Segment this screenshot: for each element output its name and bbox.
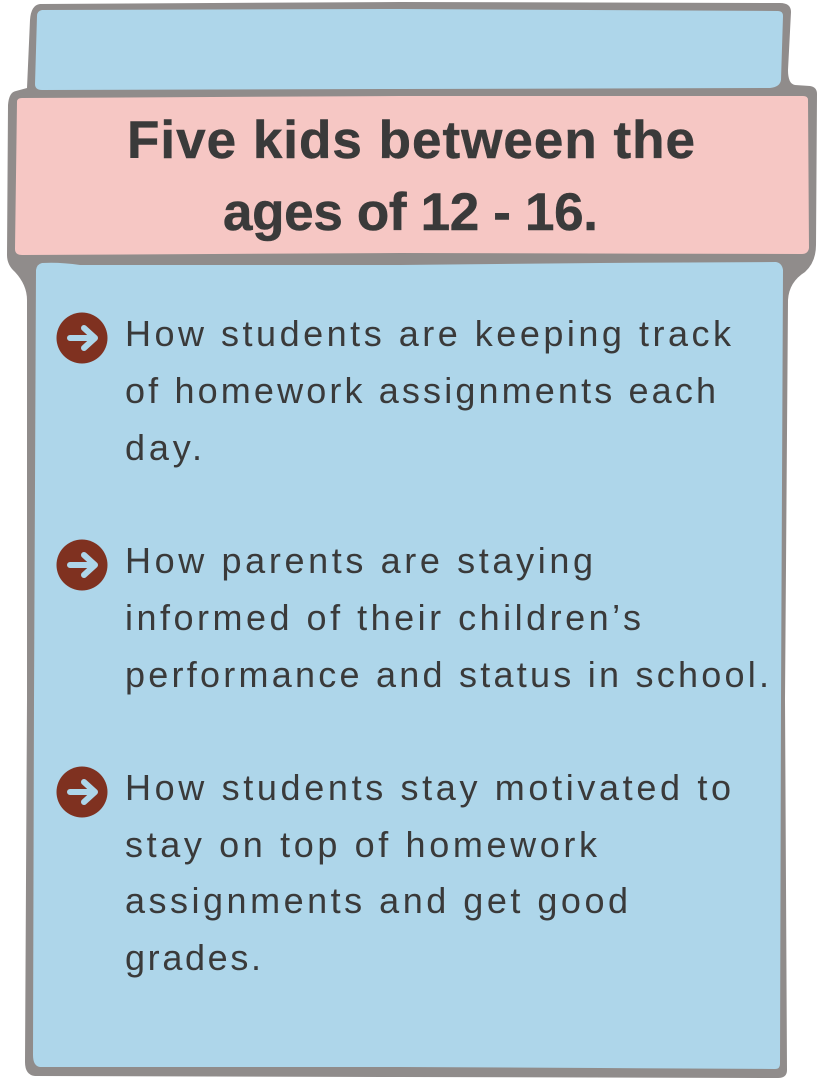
icon: arrow bullet 2	[56, 540, 108, 590]
title: ages of 12 - 16.	[223, 183, 598, 242]
text: bullet 1: How students are keeping track	[125, 313, 732, 354]
text: bullet 3: assignments and get good	[125, 880, 628, 921]
text: bullet 2: How parents are staying	[125, 540, 593, 581]
text: bullet 1	[125, 313, 732, 468]
panel: main blue body	[33, 262, 783, 1069]
text: bullet 1: of homework assignments each	[125, 370, 716, 411]
panel: top blue tab	[35, 9, 783, 90]
text: bullet 3	[125, 767, 731, 978]
title: Five kids between the	[127, 111, 695, 170]
text: bullet 2: performance and status in school.	[125, 654, 769, 695]
icon: arrow bullet 3	[56, 766, 108, 818]
icon: arrow bullet 1	[56, 312, 108, 364]
text: bullet 3: stay on top of homework	[125, 824, 598, 865]
panel: pink title banner	[15, 96, 809, 255]
bullet item 3	[56, 766, 731, 978]
text: bullet 3: How students stay motivated to	[125, 767, 731, 808]
bullet item 1	[56, 312, 732, 468]
title	[127, 111, 695, 242]
text: bullet 1: day.	[125, 427, 202, 468]
text: bullet 3: grades.	[125, 937, 261, 978]
text: bullet 2	[125, 540, 769, 695]
text: bullet 2: informed of their children’s	[125, 597, 641, 638]
bullet item 2	[56, 540, 769, 695]
